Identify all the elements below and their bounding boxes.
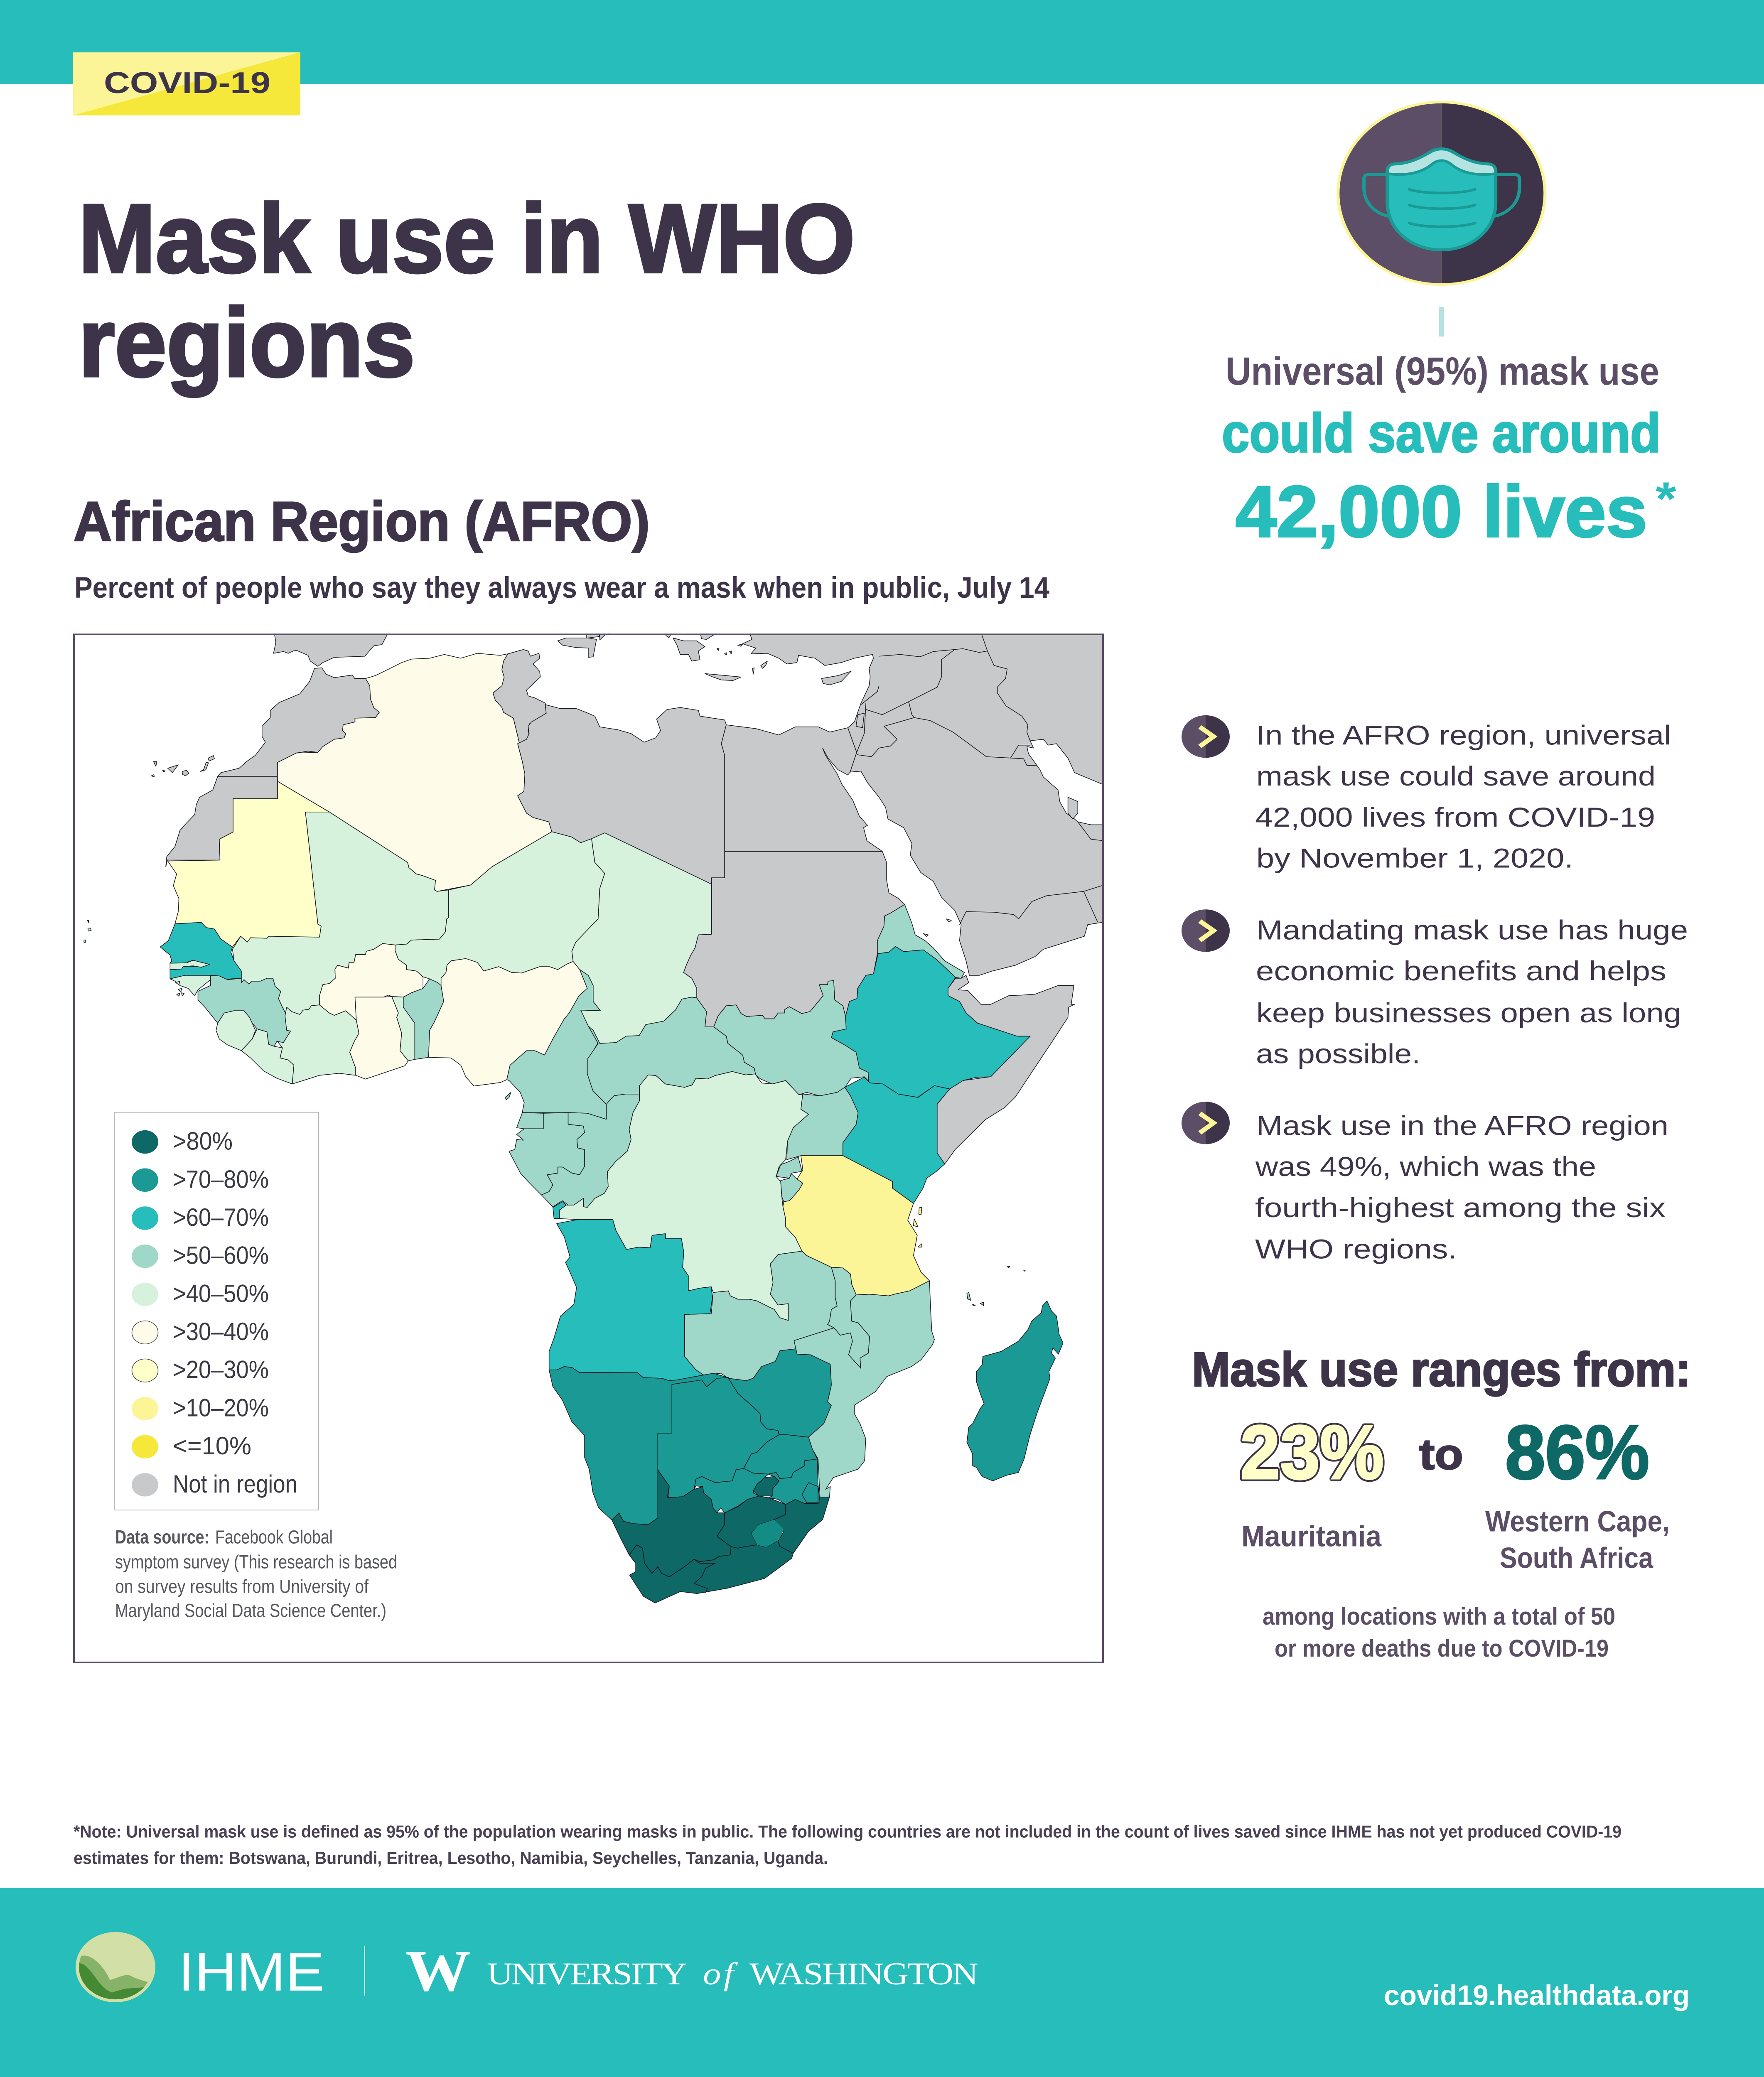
bullet: economic benefits: keep businesses open as long — [1256, 997, 1681, 1028]
data source: symptom survey (This research is based — [115, 1552, 397, 1573]
bullet: lives saved — [1182, 715, 1671, 874]
tag: COVID-19 — [73, 52, 300, 115]
country: Senegal — [160, 922, 241, 980]
title: regions — [79, 288, 415, 397]
value: 86%: 86% — [1505, 1409, 1649, 1495]
legend item: 40-50 — [132, 1279, 269, 1307]
country: Guinea-Bissau — [170, 975, 211, 996]
callout: universal mask use: Universal (95%) mask use — [1226, 350, 1659, 393]
country: Burkina Faso — [319, 943, 423, 1020]
islands: Comoros — [967, 1293, 984, 1306]
legend item: 60-70 — [132, 1203, 269, 1231]
South Africa: Gauteng — [753, 1476, 779, 1496]
country: Algeria — [278, 653, 552, 891]
land: Cyprus — [821, 671, 851, 685]
logo: IHME wordmark: IHME — [178, 1942, 324, 2002]
country: Burundi — [781, 1174, 803, 1202]
country: Cameroon — [507, 970, 606, 1120]
footnote — [74, 1822, 1622, 1868]
legend item: 30-40: >30–40% — [173, 1318, 269, 1345]
label: Western Cape: Western Cape, — [1485, 1505, 1670, 1537]
South Africa: KwaZulu-Natal — [774, 1497, 830, 1553]
legend item: over 80 — [132, 1127, 233, 1155]
South Africa: North West — [694, 1468, 769, 1513]
legend item: 50-60 — [132, 1241, 269, 1269]
country: Ethiopia — [831, 946, 1030, 1097]
islands: Cape Verde — [84, 920, 91, 943]
land: Greece — [663, 632, 767, 680]
map panel — [73, 632, 1106, 1663]
country: Lesotho — [751, 1520, 784, 1547]
icon: chevron 1 — [1182, 715, 1230, 758]
South Africa: Northern Cape — [612, 1470, 731, 1577]
land: Qatar — [1068, 797, 1078, 819]
country: Benin — [403, 979, 444, 1059]
legend item: 60-70: >60–70% — [173, 1203, 269, 1231]
legend item: 20-30 — [132, 1356, 269, 1384]
bullet: regional rank: WHO regions. — [1255, 1234, 1457, 1264]
legend item: not in region — [132, 1470, 297, 1498]
logo: University of Washington: of — [703, 1956, 738, 1991]
islands: Zanzibar and Mafia — [914, 1207, 922, 1247]
map frame — [74, 634, 1103, 1662]
country: Tanzania — [783, 1156, 929, 1296]
word: to: to — [1419, 1430, 1463, 1478]
country: Chad — [572, 833, 712, 1043]
top banner — [0, 0, 1764, 84]
legend item: 50-60: >50–60% — [173, 1241, 269, 1269]
land: Canary Islands — [151, 756, 214, 777]
legend item: 40-50: >40–50% — [173, 1279, 269, 1307]
bullet: lives saved: In the AFRO region, universal — [1256, 720, 1671, 750]
legend item: 70-80 — [132, 1165, 269, 1193]
country: Eritrea — [877, 904, 964, 978]
South Africa: Free State — [717, 1496, 786, 1548]
value: 23%: 23% — [1240, 1409, 1384, 1495]
subtitle: Percent of people who say they always wear a mask when in public, July 14 — [74, 571, 1049, 604]
country: Sierra Leone — [216, 1011, 256, 1051]
islands: Bijagos — [176, 981, 184, 996]
bullet: lives saved: mask use could save around — [1256, 761, 1656, 791]
callout: universal mask use: 42,000 lives — [1236, 471, 1647, 552]
country: Democratic Republic of the Congo — [559, 1072, 808, 1321]
data source: Maryland Social Data Science Center.) — [115, 1600, 386, 1621]
country: Ghana — [350, 997, 408, 1079]
bullet: regional rank — [1182, 1102, 1668, 1264]
country: Botswana — [658, 1377, 779, 1498]
islands: Red Sea — [924, 919, 951, 937]
South Africa: Limpopo — [744, 1435, 817, 1478]
data source: on survey results from University of — [115, 1576, 369, 1597]
land: Middle East — [743, 632, 1106, 975]
legend item: not in region: Not in region — [173, 1470, 297, 1498]
callout: universal mask use: could save around — [1222, 402, 1661, 464]
country: Nigeria — [429, 959, 587, 1086]
bullet: lives saved: 42,000 lives from COVID-19 — [1255, 802, 1655, 832]
islands: Sao Tome — [505, 1093, 511, 1100]
bullet: economic benefits — [1182, 909, 1688, 1069]
range note: or more deaths due to COVID-19 — [1275, 1635, 1609, 1662]
country: Guinea — [198, 975, 291, 1046]
label: Western Cape — [1485, 1505, 1670, 1574]
legend item: 30-40 — [132, 1318, 269, 1345]
logo: University of Washington — [405, 1939, 978, 2003]
data source: Facebook Global — [215, 1527, 333, 1548]
tag: COVID-19: COVID-19 — [104, 66, 270, 100]
country: Madagascar — [967, 1301, 1063, 1481]
logo: IHME mark — [76, 1932, 155, 2003]
legend item: 20-30: >20–30% — [173, 1356, 269, 1384]
bullet: lives saved: by November 1, 2020. — [1256, 843, 1573, 874]
callout: universal mask use: * — [1656, 473, 1676, 525]
legend item: up to 10: <=10% — [173, 1432, 251, 1460]
land: Egypt — [721, 725, 882, 852]
logo: University of Washington: UNIVERSITY — [487, 1956, 687, 1991]
land: Tunisia — [493, 650, 546, 743]
data source: Data source: — [115, 1527, 209, 1548]
label: Mauritania: Mauritania — [1241, 1520, 1382, 1552]
heading: African Region: African Region (AFRO) — [74, 491, 650, 552]
land: Spain and Portugal — [273, 632, 388, 666]
country: Togo — [392, 997, 415, 1061]
country borders in the Middle East — [856, 632, 1106, 925]
legend item: over 80: >80% — [173, 1127, 233, 1155]
country: Liberia — [241, 1029, 294, 1084]
legend — [114, 1112, 319, 1510]
country: Gabon — [509, 1112, 585, 1195]
title — [79, 184, 855, 397]
land: Western Sahara — [166, 776, 278, 867]
website: covid19.healthdata.org — [1384, 1979, 1690, 2011]
logo divider — [364, 1946, 365, 1996]
islands: Seychelles — [1007, 1266, 1025, 1272]
data source — [115, 1527, 397, 1621]
country: Cote d'Ivoire — [278, 1005, 359, 1084]
country: Malawi — [828, 1267, 870, 1368]
bullet: regional rank: was 49%, which was the — [1255, 1151, 1596, 1182]
country: Mali — [233, 812, 449, 1015]
legend item: 70-80: >70–80% — [173, 1165, 269, 1193]
land: Somalia and Djibouti — [937, 975, 1074, 1164]
logo: University of Washington: WASHINGTON — [749, 1956, 978, 1991]
legend item: up to 10 — [132, 1432, 251, 1460]
callout: universal mask use — [1222, 350, 1676, 552]
country: Angola — [549, 1220, 712, 1381]
title: Mask use in WHO — [79, 184, 855, 293]
footer band — [0, 1888, 1764, 2077]
country: Namibia — [549, 1367, 728, 1525]
legend item: 10-20 — [132, 1394, 269, 1422]
value: 23%: 23% — [1240, 1409, 1384, 1495]
country: Central African Republic — [587, 997, 756, 1120]
tick connector — [1439, 307, 1444, 336]
range panel — [1192, 1343, 1691, 1662]
country: Equatorial Guinea — [517, 1112, 543, 1129]
country: Mozambique — [794, 1281, 934, 1497]
range note — [1263, 1603, 1615, 1662]
country: South Sudan — [714, 981, 869, 1096]
South Africa: Western Cape border — [694, 1559, 715, 1593]
country: Niger — [395, 832, 605, 985]
country: Zambia — [685, 1251, 837, 1381]
country: Uganda — [787, 1088, 858, 1160]
country: Kenya — [843, 1077, 950, 1203]
bullet: regional rank: Mask use in the AFRO region — [1256, 1110, 1668, 1141]
country: Cabinda, Angola — [553, 1202, 566, 1218]
land: Sicily — [558, 638, 597, 657]
range note: among locations with a total of 50 — [1263, 1603, 1615, 1630]
footnote: estimates for them: Botswana, Burundi, Eritrea, Lesotho, Namibia, Seychelles, Tanzania, Uganda. — [74, 1849, 828, 1868]
country: Eswatini — [802, 1483, 818, 1503]
land: Italy — [587, 632, 600, 638]
South Africa: Mpumalanga — [769, 1459, 820, 1505]
country: Republic of the Congo — [541, 1094, 639, 1208]
icon: chevron 2 — [1182, 909, 1230, 952]
land: Morocco — [218, 668, 379, 776]
icon: face mask — [1337, 101, 1546, 286]
bullet: regional rank: fourth-highest among the six — [1255, 1192, 1666, 1223]
land: Sudan — [683, 852, 905, 1027]
bullet: economic benefits: Mandating mask use has huge — [1256, 915, 1688, 945]
icon: chevron 3 — [1182, 1102, 1230, 1144]
country: Rwanda — [776, 1157, 802, 1178]
legend item: 10-20: >10–20% — [173, 1394, 269, 1422]
land: Libya — [518, 705, 726, 884]
country: Mauritania — [168, 781, 329, 947]
South Africa: Eastern and Western Cape — [629, 1540, 793, 1603]
bullet: economic benefits: economic benefits and helps — [1256, 955, 1666, 986]
country: Zimbabwe — [728, 1349, 831, 1437]
logo: University of Washington: W — [405, 1939, 471, 2003]
country: The Gambia — [170, 960, 209, 970]
bullet: economic benefits: as possible. — [1256, 1038, 1420, 1069]
label: Western Cape: South Africa — [1500, 1542, 1653, 1574]
